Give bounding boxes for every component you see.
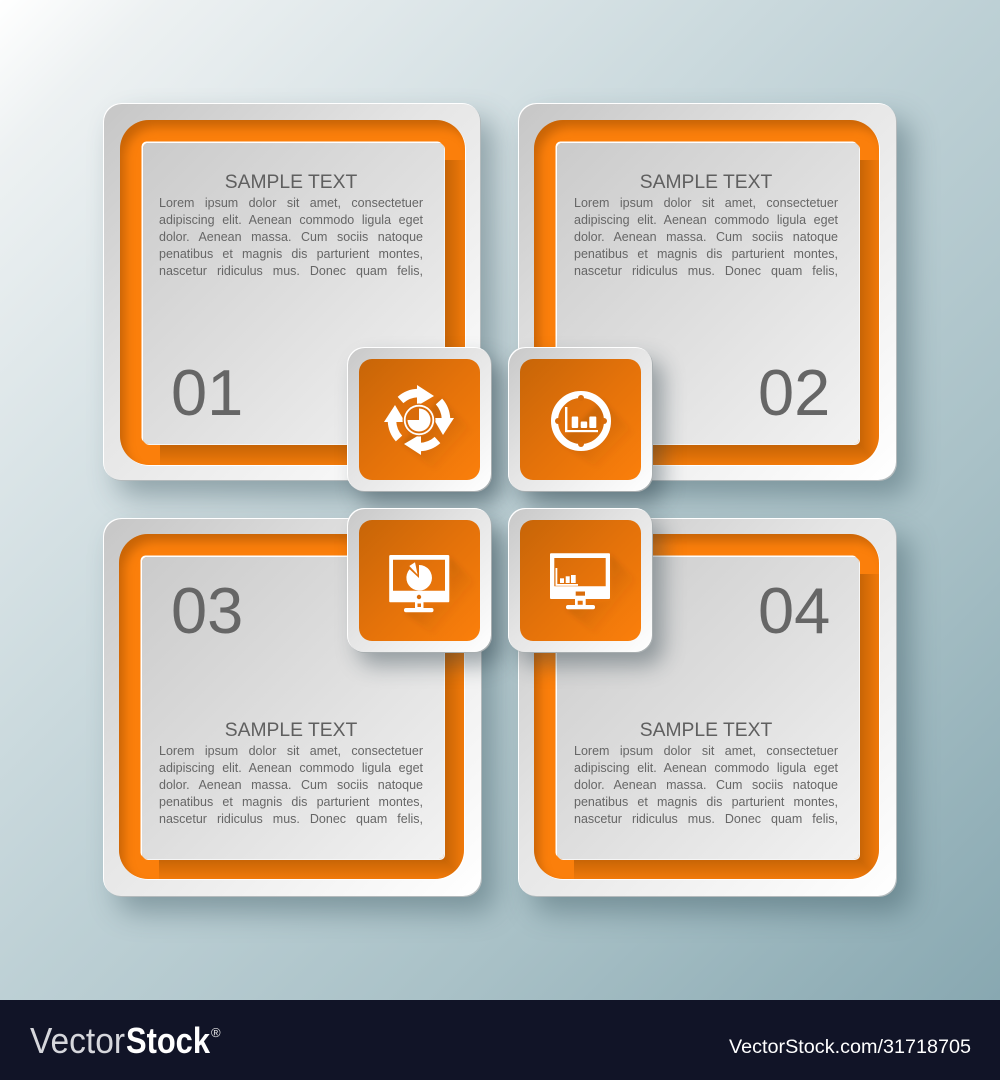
orange frame 02 <box>534 120 879 465</box>
panel: card 04 <box>518 518 896 896</box>
tile: target chart icon <box>508 347 652 491</box>
body text 03: Lorem ipsum dolor sit amet, consectetuer <box>159 744 423 758</box>
body text 01: dolor. Aenean massa. Cum sociis natoque <box>159 230 423 244</box>
body text 02: Lorem ipsum dolor sit amet, consectetuer <box>574 196 838 210</box>
panel: card 03 <box>103 518 481 896</box>
body text 04: adipiscing elit. Aenean commodo ligula eget <box>574 761 838 775</box>
footer logo and image id: Stock <box>126 1020 211 1061</box>
body text 02: adipiscing elit. Aenean commodo ligula eget <box>574 213 838 227</box>
body text 01: nascetur ridiculus mus. Donec quam felis, <box>159 264 423 278</box>
tile: cycle icon <box>347 347 491 491</box>
orange frame 01 <box>120 120 465 465</box>
number 04: 04 <box>758 574 830 647</box>
tile: monitor pie icon <box>347 508 491 652</box>
panel: card 02 <box>518 103 896 480</box>
body text 03 <box>159 744 423 826</box>
icon: monitor with pie chart <box>389 555 467 626</box>
body text 02: penatibus et magnis dis parturient montes, <box>574 247 838 261</box>
body text 02 <box>574 196 838 278</box>
body text 03: adipiscing elit. Aenean commodo ligula eget <box>159 761 423 775</box>
body text 01: Lorem ipsum dolor sit amet, consectetuer <box>159 196 423 210</box>
number 02: 02 <box>758 356 830 429</box>
number 01: 01 <box>171 356 243 429</box>
body text 04 <box>574 744 838 826</box>
orange frame 04 <box>534 534 879 879</box>
inner sheet 04 <box>556 556 859 859</box>
body text 01 <box>159 196 423 278</box>
body text 02: dolor. Aenean massa. Cum sociis natoque <box>574 230 838 244</box>
body text 04: nascetur ridiculus mus. Donec quam felis, <box>574 812 838 826</box>
body text 02: nascetur ridiculus mus. Donec quam felis, <box>574 264 838 278</box>
footer logo and image id: ® <box>211 1025 221 1040</box>
heading 02: SAMPLE TEXT <box>640 172 772 193</box>
body text 04: penatibus et magnis dis parturient montes, <box>574 795 838 809</box>
footer logo and image id: Vector <box>30 1020 125 1061</box>
inner sheet 02 <box>556 142 859 444</box>
icon: cycle arrows around pie chart <box>384 385 462 462</box>
number 03: 03 <box>171 574 243 647</box>
body text 01: penatibus et magnis dis parturient montes, <box>159 247 423 261</box>
panel: card 01 <box>103 103 480 480</box>
body text 01: adipiscing elit. Aenean commodo ligula eget <box>159 213 423 227</box>
body text 04: dolor. Aenean massa. Cum sociis natoque <box>574 778 838 792</box>
body text 04: Lorem ipsum dolor sit amet, consectetuer <box>574 744 838 758</box>
heading 03: SAMPLE TEXT <box>225 720 357 741</box>
footer logo and image id <box>30 1020 971 1061</box>
body text 03: dolor. Aenean massa. Cum sociis natoque <box>159 778 423 792</box>
body text 03: nascetur ridiculus mus. Donec quam felis, <box>159 812 423 826</box>
icon: bar chart in target ring <box>551 391 624 460</box>
orange frame 03 <box>119 534 464 879</box>
tile: monitor chart icon <box>508 508 652 652</box>
body text 03: penatibus et magnis dis parturient montes, <box>159 795 423 809</box>
icon: monitor with bar chart <box>550 553 628 624</box>
inner sheet 01 <box>142 142 444 444</box>
footer bar <box>0 1000 1000 1080</box>
footer logo and image id: VectorStock.com/31718705 <box>729 1037 971 1058</box>
heading 01: SAMPLE TEXT <box>225 172 357 193</box>
inner sheet 03 <box>142 556 444 859</box>
heading 04: SAMPLE TEXT <box>640 720 772 741</box>
